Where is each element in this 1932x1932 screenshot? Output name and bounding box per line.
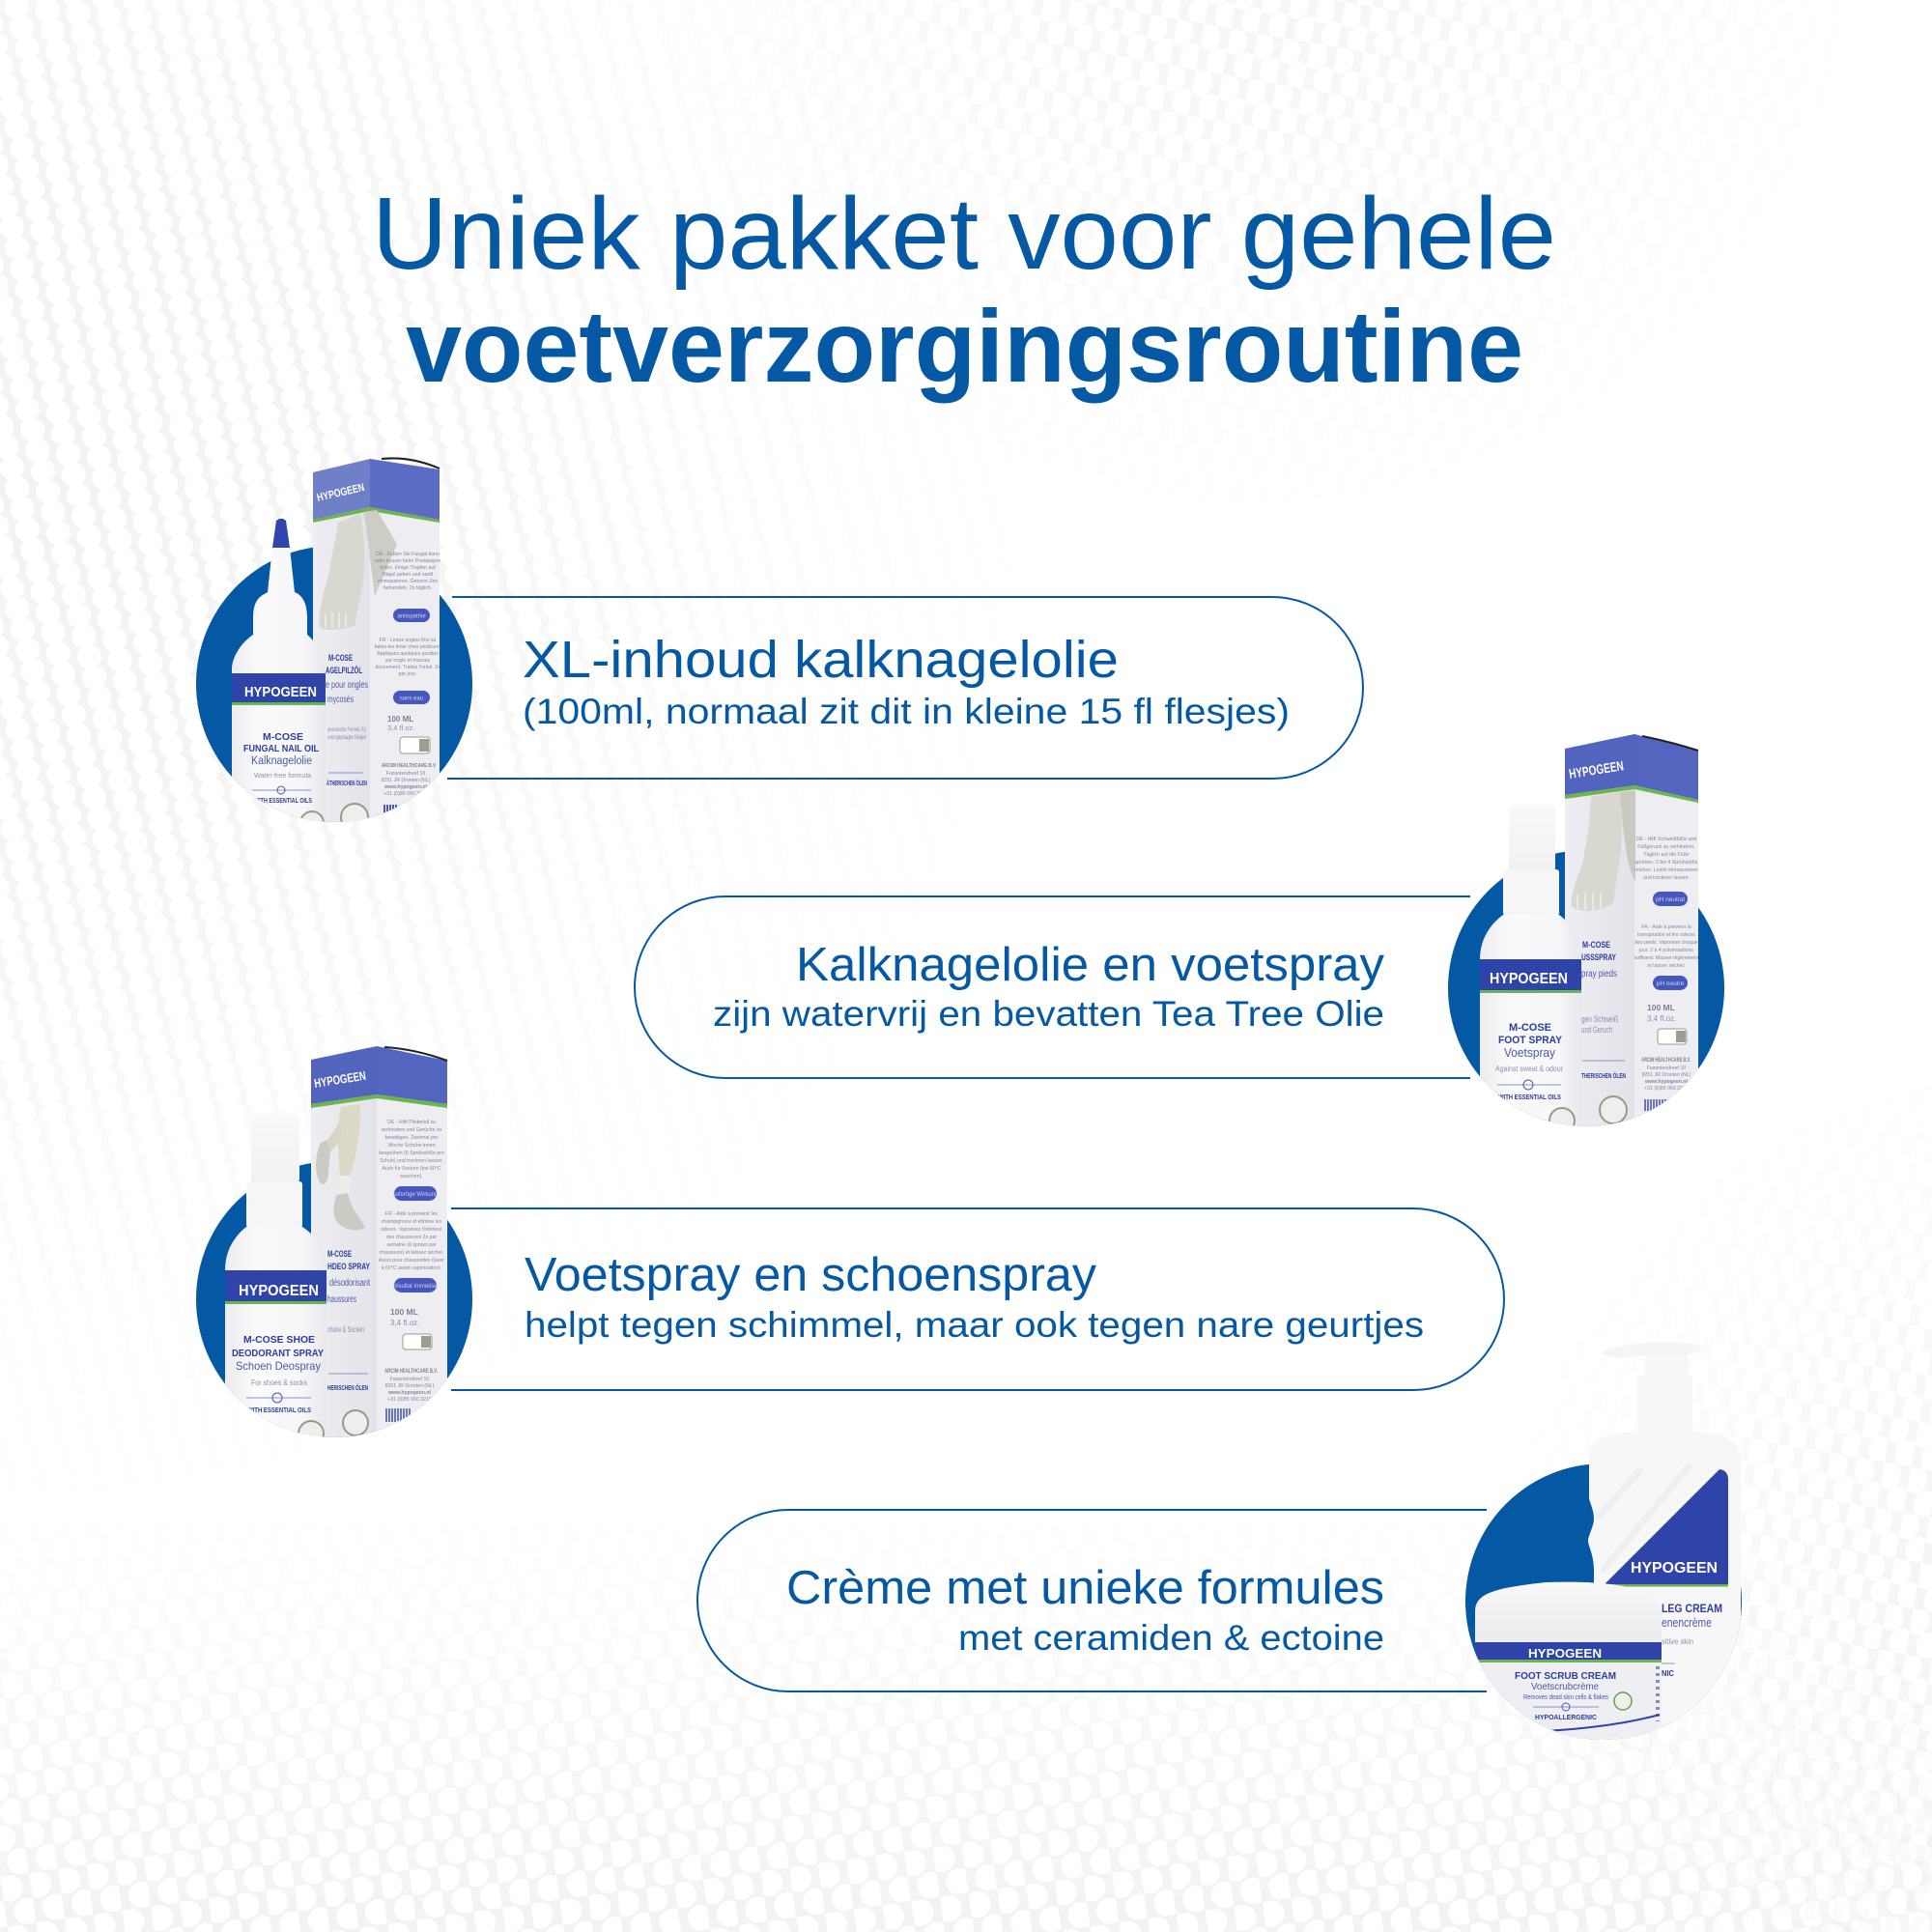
product: schoenspray bottle and box: waschen).: [400, 1174, 423, 1179]
product: voetspray bottle and box: pH neutre: [1657, 980, 1685, 987]
product: voetspray bottle and box: reichen. Leicht einmassieren: [1634, 867, 1698, 873]
product: schoenspray bottle and box: haussures: [327, 1294, 356, 1305]
product: voetspray bottle and box: 100 ML: [1647, 1003, 1675, 1012]
product: voetspray bottle and box: [1480, 734, 1699, 1140]
product: voetspray bottle and box: USSSPRAY: [1581, 952, 1616, 963]
product: crème pump bottle and scrub jar: HYPOGEEN: [1528, 1646, 1602, 1661]
product: kalknagelolie bottle and box: sur ongle et massez: [385, 658, 431, 664]
product: schoenspray bottle and box: www.hypogeen.nl: [387, 1390, 432, 1396]
product: schoenspray bottle and box: besprühen (6 Sprühstöße pro: [379, 1151, 444, 1156]
panel: XL-inhoud kalknagelolie: [447, 597, 1363, 779]
product: kalknagelolie bottle and box: DE - Fußen Sie Fungal dunn: [376, 552, 440, 557]
product: schoenspray bottle and box: ARCIM HEALTHCARE B.V.: [384, 1368, 438, 1375]
product: kalknagelolie bottle and box: M-COSE: [328, 653, 353, 663]
product: kalknagelolie bottle and box: par jour.: [399, 671, 416, 677]
product: voetspray bottle and box: THERISCHEN ÖLEN: [1581, 1071, 1626, 1080]
panel: Kalknagelolie en voetspray: [635, 896, 1470, 1078]
product: voetspray bottle and box: und trocknen lassen.: [1643, 875, 1690, 881]
panel: Crème met unieke formules: [697, 1510, 1487, 1691]
product: voetspray bottle and box: Fazantendreef 10: [1647, 1065, 1686, 1071]
product: kalknagelolie bottle and box: sans eau: [400, 696, 423, 701]
icon: blue circle product 3: [196, 1161, 472, 1437]
product: voetspray bottle and box: Fußgeruch zu verhindern.: [1637, 844, 1695, 850]
product: kalknagelolie bottle and box: oder besser beim Postatogen: [375, 558, 440, 564]
product: crème pump bottle and scrub jar: [1475, 1343, 1741, 1748]
product: kalknagelolie bottle and box: einmassieren. Genzen Zeh: [378, 579, 438, 584]
product: schoenspray bottle and box: HERISCHEN ÖLEN: [327, 1383, 368, 1392]
product: schoenspray bottle and box: HDEO SPRAY: [327, 1262, 370, 1272]
heading: Kalknagelolie en voetspray: Kalknagelolie en voetspray: [796, 939, 1385, 991]
product: schoenspray bottle and box: [225, 1046, 447, 1449]
product: voetspray bottle and box: und Geruch: [1581, 1025, 1612, 1035]
product: voetspray bottle and box: pH neutral: [1656, 896, 1686, 903]
product: kalknagelolie bottle and box: antiopathie: [397, 614, 426, 620]
product: voetspray bottle and box: 3,4 fl.oz.: [1647, 1014, 1676, 1023]
product: schoenspray bottle and box: chaussure) et laissez sécher.: [380, 1250, 443, 1256]
product: kalknagelolie bottle and box: FUNGAL NAIL OIL: [243, 743, 319, 754]
product: schoenspray bottle and box: WITH ESSENTIAL OILS: [247, 1406, 311, 1414]
product: kalknagelolie bottle and box: M-COSE: [263, 731, 303, 743]
product: kalknagelolie bottle and box: 100 ML: [387, 715, 413, 724]
title: voetverzorgingsroutine: [406, 290, 1523, 404]
product: voetspray bottle and box: DE - Hilft Schweißfüße und: [1636, 837, 1696, 842]
product: voetspray bottle and box: Against sweat & odour: [1495, 1065, 1563, 1073]
product: voetspray bottle and box: WITH ESSENTIAL OILS: [1498, 1093, 1561, 1101]
product: schoenspray bottle and box: beseitigen. Zweimal pro: [385, 1135, 438, 1141]
icon: blue circle product 2: [1448, 850, 1724, 1126]
product: kalknagelolie bottle and box: doucement. Traitez l'orteil. 2x: [375, 665, 440, 670]
text: XL-inhoud detail: (100ml, normaal zit dit in kleine 15 fl flesjes): [523, 692, 1290, 731]
product: schoenspray bottle and box: résultat immédiat: [393, 1284, 438, 1290]
product: voetspray bottle and box: et laisser sécher.: [1648, 963, 1685, 969]
product: voetspray bottle and box: sprühen. 2 bis 4 Sprühstöße: [1634, 860, 1698, 866]
text: ceramiden detail: met ceramiden & ectoine: [958, 1618, 1384, 1658]
heading: XL-inhoud: XL-inhoud kalknagelolie: [523, 631, 1119, 689]
text: watervrij detail: zijn watervrij en bevatten Tea Tree Olie: [713, 994, 1384, 1034]
product: schoenspray bottle and box: Schuh) und trocknen lassen.: [380, 1158, 443, 1164]
product: schoenspray bottle and box: champignons et élimine les: [382, 1219, 442, 1225]
product: crème pump bottle and scrub jar: HYPOALLERGENIC: [1535, 1713, 1598, 1721]
icon: blue circle product 1: [196, 546, 472, 822]
product: voetspray bottle and box: pray pieds: [1581, 969, 1617, 980]
product: voetspray bottle and box: +31 (0)85 060 3219: [1644, 1086, 1689, 1092]
product: schoenspray bottle and box: sofortige Wirkung: [393, 1192, 438, 1198]
product: schoenspray bottle and box: Fazantendreef 10: [390, 1377, 429, 1382]
product: schoenspray bottle and box: FR - Aide à prévenir les: [385, 1211, 439, 1217]
product: voetspray bottle and box: FR - Aide à prévenir la: [1641, 924, 1691, 930]
product: schoenspray bottle and box: M-COSE SHOE: [243, 1334, 315, 1346]
product: voetspray bottle and box: suffisent. Masser légèrement: [1634, 955, 1699, 961]
panel: Voetspray en schoenspray: [451, 1208, 1504, 1390]
product: kalknagelolie bottle and box: Water-free formula: [254, 771, 312, 780]
product: crème pump bottle and scrub jar: FOOT SCRUB CREAM: [1515, 1671, 1616, 1682]
product: schoenspray bottle and box: DEODORANT SPRAY: [232, 1348, 324, 1359]
product: schoenspray bottle and box: M-COSE: [327, 1249, 352, 1260]
product: kalknagelolie bottle and box: +31 (0)85 060 3219: [384, 791, 428, 797]
product: voetspray bottle and box: FOOT SPRAY: [1498, 1035, 1563, 1046]
product: schoenspray bottle and box: chuhe & Socken: [327, 1325, 364, 1334]
icon: blue circle product 4: [1465, 1463, 1742, 1740]
product: schoenspray bottle and box: à 60°C avant vaporisation).: [382, 1265, 441, 1271]
product: kalknagelolie bottle and box: ARCIM HEALTHCARE B.V: [382, 763, 436, 769]
product: schoenspray bottle and box: semaine (6 sprays par: [386, 1242, 437, 1248]
product: kalknagelolie bottle and box: mycosés: [327, 695, 354, 705]
product: schoenspray bottle and box: For shoes & socks: [251, 1378, 307, 1387]
product: kalknagelolie bottle and box: 3,4 fl.oz.: [387, 724, 414, 732]
product: schoenspray bottle and box: Woche Schuhe innen: [387, 1143, 436, 1149]
product: kalknagelolie bottle and box: und geplagte Nägel: [327, 735, 366, 741]
product: kalknagelolie bottle and box: HYPOGEEN: [244, 684, 317, 700]
title: Uniek pakket voor gehele: [372, 177, 1556, 291]
product: schoenspray bottle and box: 8251 JR Dronten (NL): [385, 1383, 435, 1389]
product: schoenspray bottle and box: 3,4 fl.oz.: [390, 1319, 419, 1327]
text: schimmel detail: helpt tegen schimmel, maar ook tegen nare geurtjes: [525, 1305, 1424, 1345]
product: voetspray bottle and box: transpiration et les odeurs: [1637, 932, 1695, 938]
product: kalknagelolie bottle and box: Kalknagelolie: [251, 755, 312, 767]
product: voetspray bottle and box: M-COSE: [1509, 1022, 1551, 1034]
product: kalknagelolie bottle and box: HYPOGEEN: [316, 482, 365, 504]
product: crème pump bottle and scrub jar: Voetscrubcrème: [1531, 1682, 1599, 1692]
product: kalknagelolie bottle and box: 8251 JR Dronten (NL): [382, 778, 431, 783]
product: schoenspray bottle and box: Auch für Socken (bei 60°C: [382, 1166, 441, 1172]
product: voetspray bottle and box: gen Schweiß: [1581, 1014, 1618, 1024]
product: kalknagelolie bottle and box: FR - Limez ongles fins ou: [380, 638, 437, 643]
heading: Voetspray en schoenspray: Voetspray en schoenspray: [525, 1249, 1097, 1301]
product: crème pump bottle and scrub jar: NIC: [1662, 1669, 1674, 1678]
product: crème pump bottle and scrub jar: HYPOGEEN: [1631, 1560, 1718, 1577]
product: kalknagelolie bottle and box: feilen. Einige Tropfen auf: [380, 565, 436, 571]
product: voetspray bottle and box: Täglich auf die Füße: [1643, 852, 1690, 858]
product: kalknagelolie bottle and box: WITH ESSENTIAL OILS: [254, 798, 312, 805]
product: kalknagelolie bottle and box: www.hypogeen.nl: [384, 784, 428, 790]
product: crème pump bottle and scrub jar: LEG CREAM: [1662, 1602, 1722, 1615]
product: kalknagelolie bottle and box: AGELPILZÖL: [326, 666, 362, 675]
product: schoenspray bottle and box: odeurs. Vaporisez l'intérieur: [381, 1227, 442, 1233]
product: kalknagelolie bottle and box: Appliquez quelques gouttes: [377, 651, 439, 657]
product: kalknagelolie bottle and box: faites-les limer chez pédicure.: [375, 644, 440, 650]
product: voetspray bottle and box: Voetspray: [1504, 1046, 1556, 1060]
title: [372, 177, 1556, 404]
product: kalknagelolie bottle and box: e pour ongles: [326, 680, 368, 691]
product: voetspray bottle and box: jour. 2 à 4 pulvérisations: [1638, 948, 1693, 953]
product: kalknagelolie bottle and box: Nägel geben und sanft: [383, 572, 434, 578]
product: schoenspray bottle and box: HYPOGEEN: [239, 1283, 319, 1299]
product: crème pump bottle and scrub jar: sitive skin: [1662, 1637, 1693, 1646]
product: schoenspray bottle and box: +31 (0)85 060 3219: [387, 1397, 432, 1403]
product: schoenspray bottle and box: HYPOGEEN: [313, 1068, 367, 1091]
product: schoenspray bottle and box: 100 ML: [390, 1307, 418, 1317]
product: kalknagelolie bottle and box: behandeln. 2x täglich.: [384, 585, 432, 591]
product: schoenspray bottle and box: des chaussures 2x par: [386, 1235, 437, 1240]
product: schoenspray bottle and box: Schoen Deospray: [236, 1359, 321, 1373]
product: crème pump bottle and scrub jar: enencrème: [1662, 1616, 1712, 1630]
product: kalknagelolie bottle and box: [232, 458, 440, 840]
product: kalknagelolie bottle and box: ynamische Formel, für: [327, 727, 366, 733]
product: voetspray bottle and box: HYPOGEEN: [1568, 757, 1625, 781]
product: voetspray bottle and box: 8251 JR Dronten (NL): [1642, 1072, 1691, 1078]
product: kalknagelolie bottle and box: ÄTHERISCHEN ÖLEN: [327, 779, 367, 787]
product: schoenspray bottle and box: Aussi pour chaussettes (laver: [379, 1258, 444, 1264]
product: voetspray bottle and box: HYPOGEEN: [1490, 971, 1568, 987]
product: voetspray bottle and box: des pieds. Vaporiser chaque: [1634, 940, 1698, 946]
product: kalknagelolie bottle and box: Fazantendreef 10: [386, 771, 425, 777]
product: schoenspray bottle and box: verhindern und Gerüche zu: [382, 1127, 442, 1133]
product: schoenspray bottle and box: désodorisant: [329, 1278, 370, 1289]
product: schoenspray bottle and box: DE - Hilft Pilzbefall zu: [387, 1120, 436, 1125]
product: voetspray bottle and box: ARCIM HEALTHCARE B.V.: [1641, 1057, 1690, 1064]
product: voetspray bottle and box: M-COSE: [1582, 940, 1610, 951]
product: voetspray bottle and box: www.hypogeen.nl: [1644, 1079, 1689, 1085]
product: crème pump bottle and scrub jar: Removes dead skin cells & flakes: [1523, 1694, 1608, 1701]
heading: Crème met unieke formules: Crème met unieke formules: [786, 1562, 1384, 1614]
